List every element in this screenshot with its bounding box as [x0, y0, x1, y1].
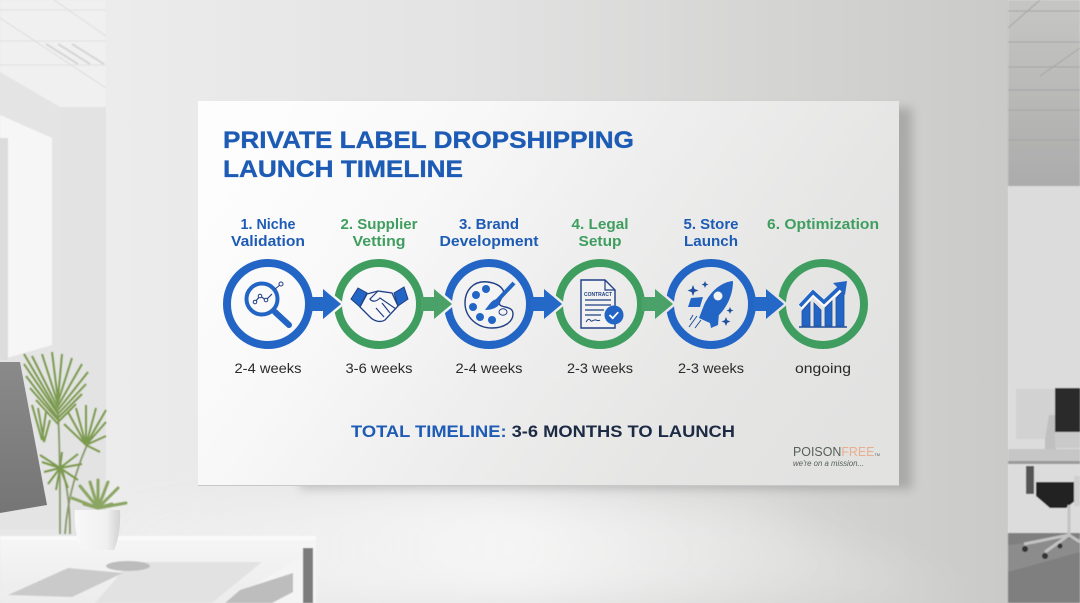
- step 5 label: [684, 217, 738, 250]
- step 1: niche validation: [227, 217, 309, 376]
- step 3 label: Development: [440, 234, 539, 250]
- total timeline callout: TOTAL TIMELINE: 3-6 MONTHS TO LAUNCH: [351, 422, 735, 441]
- step 5 label: Launch: [684, 234, 738, 250]
- step 1 ring: [227, 263, 309, 345]
- icon: contract: CONTRACT: [584, 292, 612, 298]
- sunlight on wall: [106, 490, 1000, 603]
- title: LAUNCH TIMELINE: [223, 156, 463, 183]
- step 4 duration: 2-3 weeks: [567, 360, 633, 376]
- step 2: supplier vetting: [338, 217, 420, 376]
- step 3 ring: [448, 263, 530, 345]
- arrow: step 2 to 3: [421, 289, 452, 319]
- keyboard: [8, 568, 123, 597]
- icon: potted succulent: [72, 480, 126, 550]
- step 4 label: Setup: [578, 234, 622, 250]
- step 1 duration: 2-4 weeks: [234, 360, 302, 376]
- background: left room with window and ceiling: [0, 0, 106, 603]
- title: PRIVATE LABEL DROPSHIPPING: [223, 127, 634, 154]
- step 2 label: Vetting: [352, 234, 406, 250]
- step 6: optimization: [767, 217, 879, 376]
- poster shadow: [300, 108, 912, 489]
- step 4 label: [572, 217, 628, 250]
- step 2 ring: [338, 263, 420, 345]
- arrow: step 4 to 5: [642, 289, 673, 319]
- logo: poisonfree: [793, 444, 880, 468]
- icon: rocket: [688, 281, 734, 328]
- step 1 label: Validation: [231, 234, 305, 250]
- step 5 label: 5. Store: [684, 217, 738, 233]
- step 6 duration: ongoing: [795, 360, 851, 376]
- step 3 label: 3. Brand: [459, 217, 519, 233]
- step 1 label: 1. Niche: [240, 217, 296, 233]
- icon: painter palette: [465, 282, 514, 328]
- logo: poisonfree: POISONFREETM: [793, 444, 880, 459]
- step 2 label: [340, 217, 418, 250]
- icon: contract: [581, 280, 624, 328]
- icon: handshake: [351, 287, 408, 321]
- icon: palm plant: [24, 352, 106, 534]
- panel: infographic poster: [198, 101, 899, 486]
- arrow: step 5 to 6: [753, 289, 784, 319]
- logo: poisonfree: we're on a mission...: [793, 459, 864, 468]
- step 4: legal setup: [559, 217, 641, 376]
- step 1 label: [231, 217, 305, 250]
- step 5 ring: [670, 263, 752, 345]
- step 2 label: 2. Supplier: [340, 217, 418, 233]
- desk: [0, 536, 316, 603]
- background: right room: [1008, 0, 1080, 603]
- step 4 label: 4. Legal: [572, 217, 628, 233]
- step 5: store launch: [670, 217, 752, 376]
- step 5 duration: 2-3 weeks: [678, 360, 744, 376]
- arrow: step 1 to 2: [310, 289, 341, 319]
- step 4 ring: [559, 263, 641, 345]
- icon: magnifying glass with trend: [246, 282, 289, 325]
- step 6 label: 6. Optimization: [767, 217, 879, 233]
- step 3 duration: 2-4 weeks: [456, 360, 522, 376]
- title: [223, 127, 634, 183]
- arrow: step 3 to 4: [531, 289, 562, 319]
- step 6 ring: [782, 263, 864, 345]
- step 2 duration: 3-6 weeks: [346, 360, 412, 376]
- icon: growth chart: [799, 281, 847, 327]
- mouse: [106, 561, 150, 571]
- step 3 label: [440, 217, 539, 250]
- monitor: [0, 362, 47, 513]
- step 3: brand development: [440, 217, 539, 376]
